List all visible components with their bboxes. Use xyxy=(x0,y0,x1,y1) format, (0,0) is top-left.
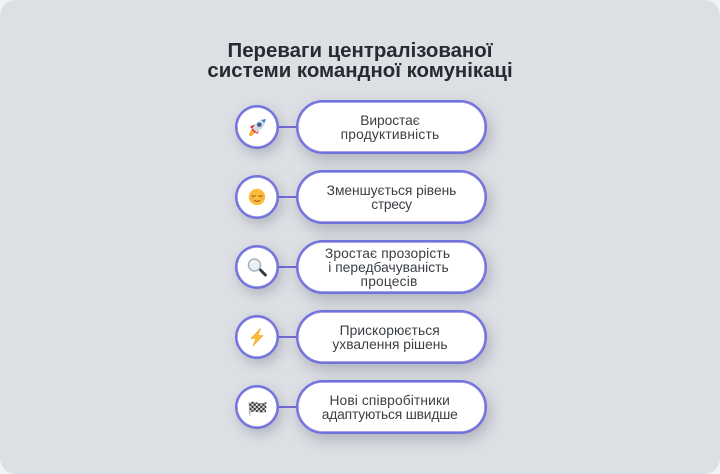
text: onboarding xyxy=(296,380,487,434)
text: stress: стресу xyxy=(371,197,412,212)
icon: lightning xyxy=(235,315,279,359)
row: transparency xyxy=(234,240,496,306)
text: decisions: Прискорюється xyxy=(340,323,440,338)
title: системи командної комунікаці xyxy=(207,60,513,82)
icon: magnifying glass xyxy=(235,245,279,289)
icon: rocket xyxy=(235,105,279,149)
title xyxy=(207,40,513,82)
icon: chequered flag xyxy=(235,385,279,429)
text: transparency xyxy=(296,240,487,294)
text: productivity xyxy=(296,100,487,154)
text: transparency: Зростає прозорість xyxy=(325,246,450,261)
row: onboarding xyxy=(234,380,496,446)
text: stress xyxy=(296,170,487,224)
text: onboarding: адаптуються швидше xyxy=(322,407,458,422)
row: productivity xyxy=(234,100,496,166)
text: onboarding: Нові співробітники xyxy=(329,393,450,408)
text: stress: Зменшується рівень xyxy=(327,183,456,198)
icon: relieved face xyxy=(235,175,279,219)
text: transparency: процесів xyxy=(361,274,417,289)
row: stress xyxy=(234,170,496,236)
row: decisions xyxy=(234,310,496,376)
text: transparency: і передбачуваність xyxy=(328,260,449,275)
text: productivity: продуктивність xyxy=(341,127,439,142)
text: productivity: Виростає xyxy=(360,113,420,128)
text: decisions xyxy=(296,310,487,364)
title: Переваги централізованої xyxy=(228,40,492,62)
text: decisions: ухвалення рішень xyxy=(332,337,448,352)
